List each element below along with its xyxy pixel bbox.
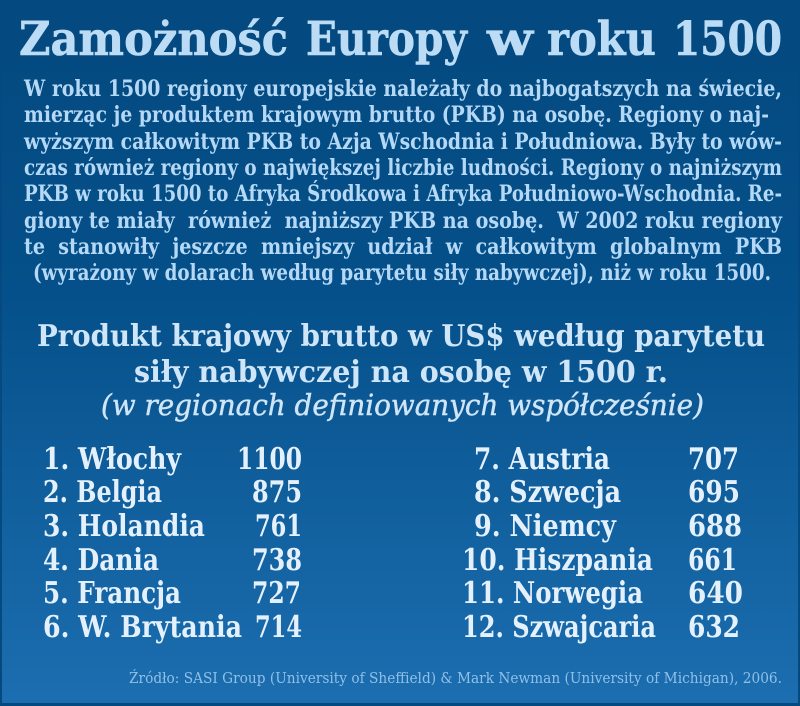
ranking: right column: 7. Austria bbox=[474, 441, 610, 476]
ranking: right column: 688 bbox=[688, 508, 742, 543]
ranking: right column: 632 bbox=[688, 609, 740, 644]
ranking: right column: 12. Szwajcaria bbox=[462, 609, 656, 644]
ranking: right column: 8. Szwecja bbox=[474, 474, 621, 509]
table heading: (w regionach definiowanych współcześnie) bbox=[101, 388, 704, 422]
title: roku bbox=[547, 12, 656, 67]
ranking: left column: 727 bbox=[252, 575, 301, 610]
ranking: left column: 6. W. Brytania bbox=[43, 609, 242, 644]
ranking: right column: 695 bbox=[688, 474, 740, 509]
ranking: right column: 661 bbox=[688, 542, 737, 577]
table heading bbox=[37, 319, 765, 422]
ranking: right column: 640 bbox=[688, 575, 743, 610]
title: Zamożność bbox=[19, 12, 288, 67]
ranking: right column: 11. Norwegia bbox=[462, 575, 643, 610]
intro text block bbox=[23, 76, 783, 286]
ranking: right column: 9. Niemcy bbox=[474, 508, 617, 543]
ranking: left column: 1. Włochy bbox=[43, 441, 182, 476]
ranking: left column: 875 bbox=[252, 474, 302, 509]
title: Europy bbox=[306, 12, 468, 67]
ranking: left column: 3. Holandia bbox=[43, 508, 205, 543]
ranking: left column: 1100 bbox=[237, 441, 302, 476]
title bbox=[19, 12, 782, 67]
ranking: left column bbox=[43, 441, 302, 644]
ranking: left column: 5. Francja bbox=[43, 575, 181, 610]
title: 1500 bbox=[673, 12, 782, 67]
table heading: siły nabywczej na osobę w 1500 r. bbox=[134, 355, 668, 390]
ranking: right column bbox=[462, 441, 743, 644]
ranking: right column: 707 bbox=[688, 441, 739, 476]
title: w bbox=[486, 12, 535, 67]
ranking: left column: 738 bbox=[252, 542, 302, 577]
ranking: left column: 2. Belgia bbox=[43, 474, 162, 509]
ranking: left column: 761 bbox=[255, 508, 302, 543]
ranking: left column: 4. Dania bbox=[43, 542, 159, 577]
ranking: right column: 10. Hiszpania bbox=[462, 542, 653, 577]
ranking: left column: 714 bbox=[255, 609, 302, 644]
